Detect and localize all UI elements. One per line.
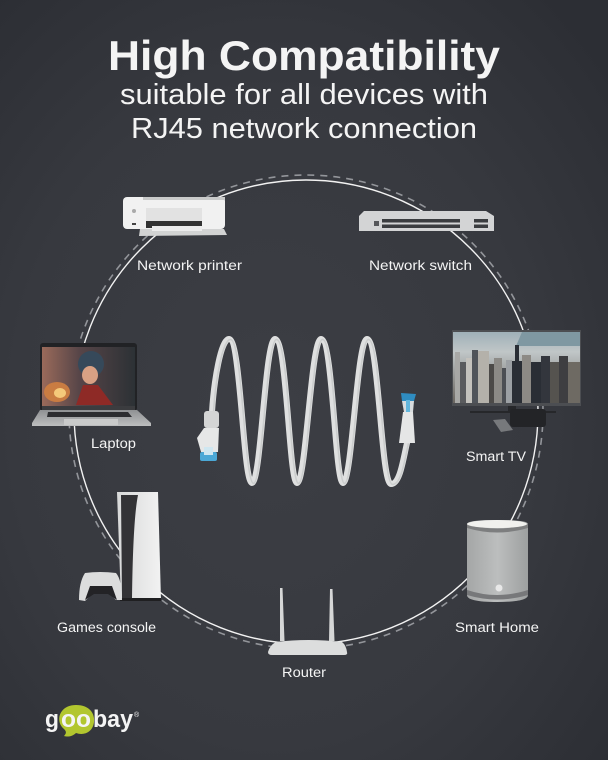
device: router bbox=[268, 588, 347, 655]
label: smart home: Smart Home bbox=[455, 620, 539, 635]
label: smart TV: Smart TV bbox=[466, 449, 526, 464]
connection ring bbox=[69, 175, 543, 649]
logo letters oo: oo bbox=[61, 706, 91, 733]
controller bbox=[79, 572, 122, 601]
network cable bbox=[197, 339, 416, 484]
subtitle: RJ45 network connection bbox=[131, 113, 477, 145]
left connector bbox=[197, 411, 219, 461]
device: network printer bbox=[123, 197, 227, 236]
device: games console bbox=[79, 492, 161, 601]
right connector bbox=[399, 393, 416, 443]
device: smart home speaker bbox=[467, 520, 528, 602]
label: games console: Games console bbox=[57, 620, 156, 635]
logo letter g: g bbox=[45, 706, 59, 733]
logo letters bay: bay bbox=[93, 706, 134, 733]
device: network switch bbox=[359, 211, 494, 231]
cable shading bbox=[214, 339, 408, 484]
title: High Compatibility bbox=[108, 32, 501, 79]
cable body bbox=[212, 339, 407, 484]
registered mark: ® bbox=[134, 711, 140, 719]
label: laptop: Laptop bbox=[91, 436, 136, 451]
subtitle bbox=[120, 79, 488, 145]
console bbox=[117, 492, 161, 601]
label: network printer: Network printer bbox=[137, 258, 243, 273]
logo blob bbox=[59, 705, 94, 737]
dashed ring bbox=[69, 175, 543, 649]
solid ring bbox=[74, 180, 538, 644]
label: router: Router bbox=[282, 665, 327, 680]
skyline bbox=[455, 345, 580, 403]
subtitle: suitable for all devices with bbox=[120, 79, 488, 111]
device: smart TV bbox=[452, 330, 581, 432]
device: laptop bbox=[32, 343, 151, 426]
label: network switch: Network switch bbox=[369, 258, 472, 273]
logo: goobay bbox=[45, 705, 140, 737]
